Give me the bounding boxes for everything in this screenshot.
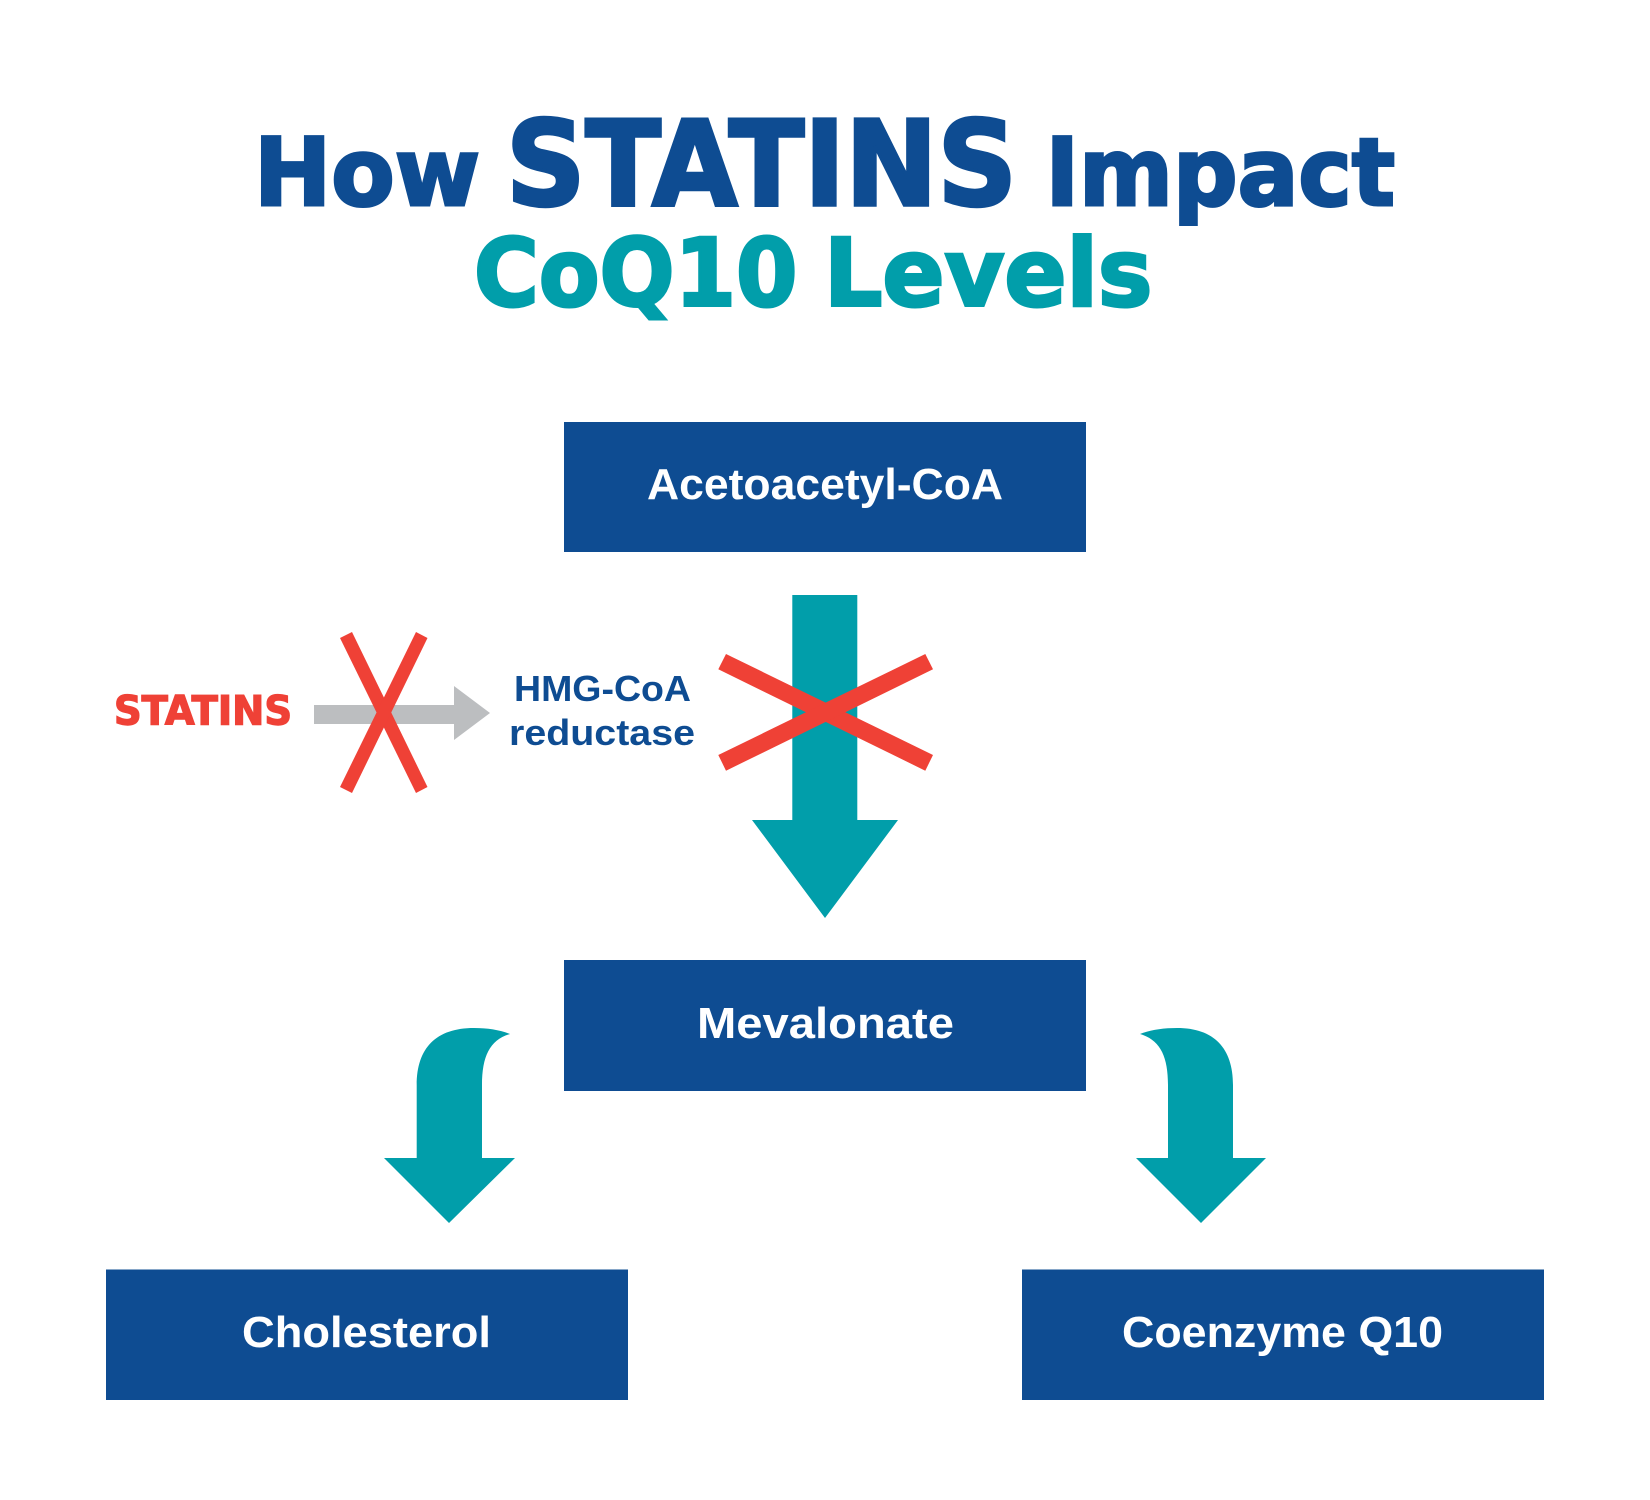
box: Mevalonate: Mevalonate (697, 999, 954, 1048)
title word: How: How (254, 119, 480, 228)
title line: CoQ10 Levels (474, 220, 1152, 328)
title line: CoQ10 Levels: CoQ10 (474, 220, 798, 328)
title line: CoQ10 Levels: Levels (824, 220, 1152, 328)
box: Coenzyme Q10: Coenzyme Q10 (1122, 1308, 1443, 1357)
box: Cholesterol: Cholesterol (242, 1308, 491, 1357)
large red X over main arrow (718, 654, 933, 771)
box: Cholesterol (106, 1270, 628, 1400)
label: STATINS: STATINS (114, 688, 292, 734)
box: Mevalonate (564, 960, 1086, 1091)
curved arrow to Coenzyme Q10 (1136, 1028, 1266, 1223)
label: HMG-CoA reductase: reductase (509, 712, 695, 753)
title word: Impact: Impact (1046, 119, 1395, 228)
box: Acetoacetyl-CoA (564, 422, 1086, 552)
box: Acetoacetyl-CoA: Acetoacetyl-CoA (647, 460, 1003, 509)
title word: STATINS: STATINS (506, 95, 1017, 233)
grey arrow (314, 686, 490, 740)
label: HMG-CoA reductase (509, 668, 695, 753)
label: HMG-CoA reductase: HMG-CoA (514, 668, 691, 709)
main teal down arrow (752, 595, 898, 918)
small red X over grey arrow (340, 632, 428, 793)
box: Coenzyme Q10 (1022, 1270, 1544, 1400)
curved arrow to Cholesterol (384, 1028, 515, 1223)
title (254, 95, 1395, 328)
